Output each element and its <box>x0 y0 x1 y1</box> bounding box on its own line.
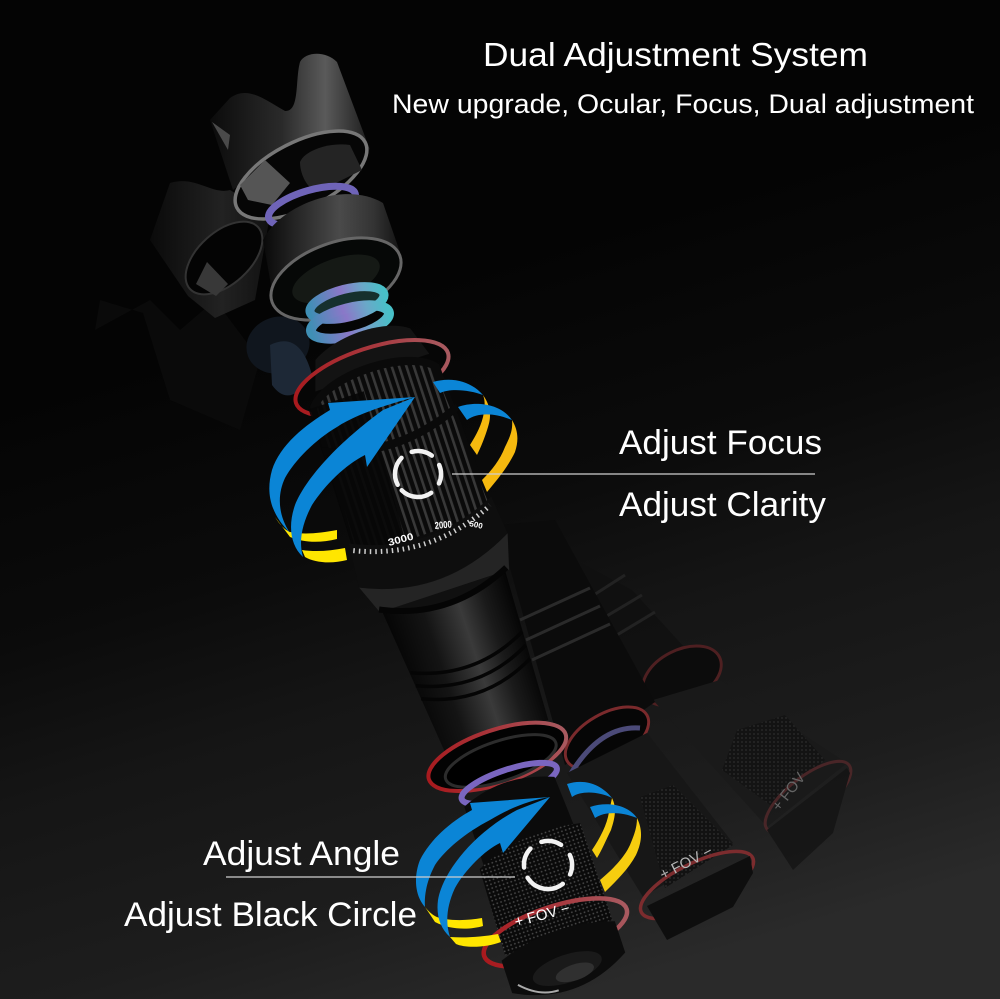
top red ring <box>287 324 457 432</box>
yellow rear bands left <box>425 907 483 929</box>
leader line: focus <box>452 473 815 475</box>
rotation arrows: angle ring <box>416 782 641 947</box>
main lower barrel <box>358 533 567 763</box>
adjustment marker: focus <box>395 451 441 497</box>
ocular barrel <box>454 764 612 955</box>
ghost lens 3: + FOV <box>769 770 809 814</box>
leader line: angle <box>226 876 515 878</box>
blue right swooshes <box>433 380 483 395</box>
blue main arrow inner <box>438 797 550 937</box>
ghost lens 3 <box>575 560 861 870</box>
blue main arrow outer <box>269 397 415 533</box>
end cap <box>498 912 631 999</box>
label: adjust focus: Adjust Focus <box>619 424 822 462</box>
blue right swooshes <box>567 782 612 798</box>
ridged focus barrel <box>299 341 498 570</box>
scale numbers <box>387 519 484 549</box>
scale numbers: 3000 <box>387 531 415 549</box>
adjustment marker: angle <box>524 841 572 889</box>
lens hood <box>210 54 380 237</box>
front lens cylinder <box>260 194 412 336</box>
bottom red ring <box>476 884 635 981</box>
eyepiece top collar <box>302 313 429 391</box>
blue main arrow outer <box>416 797 550 907</box>
distance scale collar <box>345 495 514 603</box>
label: adjust angle: Adjust Angle <box>203 835 400 873</box>
main telescope lens <box>281 308 650 999</box>
label: adjust black circle: Adjust Black Circle <box>124 896 417 934</box>
ghost lens hoods: motion trail <box>95 181 318 430</box>
title: Dual Adjustment System <box>483 36 868 73</box>
rotation arrows: focus ring <box>269 380 517 562</box>
FOV label on ocular: + FOV − <box>513 900 572 931</box>
yellow rear bands left <box>275 517 337 542</box>
yellow rear bands right <box>470 395 490 455</box>
ghost lens 2: + FOV − <box>657 843 716 884</box>
label: adjust clarity: Adjust Clarity <box>619 486 826 524</box>
ghost lens 2 <box>498 520 762 940</box>
scale numbers: 2000 <box>434 520 453 532</box>
scale numbers: 500 <box>469 519 484 531</box>
blue main arrow inner <box>291 397 415 557</box>
subtitle: New upgrade, Ocular, Focus, Dual adjustment <box>392 89 975 119</box>
coloured optical rings <box>307 280 392 345</box>
lower red ring <box>420 709 579 820</box>
yellow rear bands right <box>592 798 615 858</box>
coloured ring behind cylinder <box>264 178 360 234</box>
